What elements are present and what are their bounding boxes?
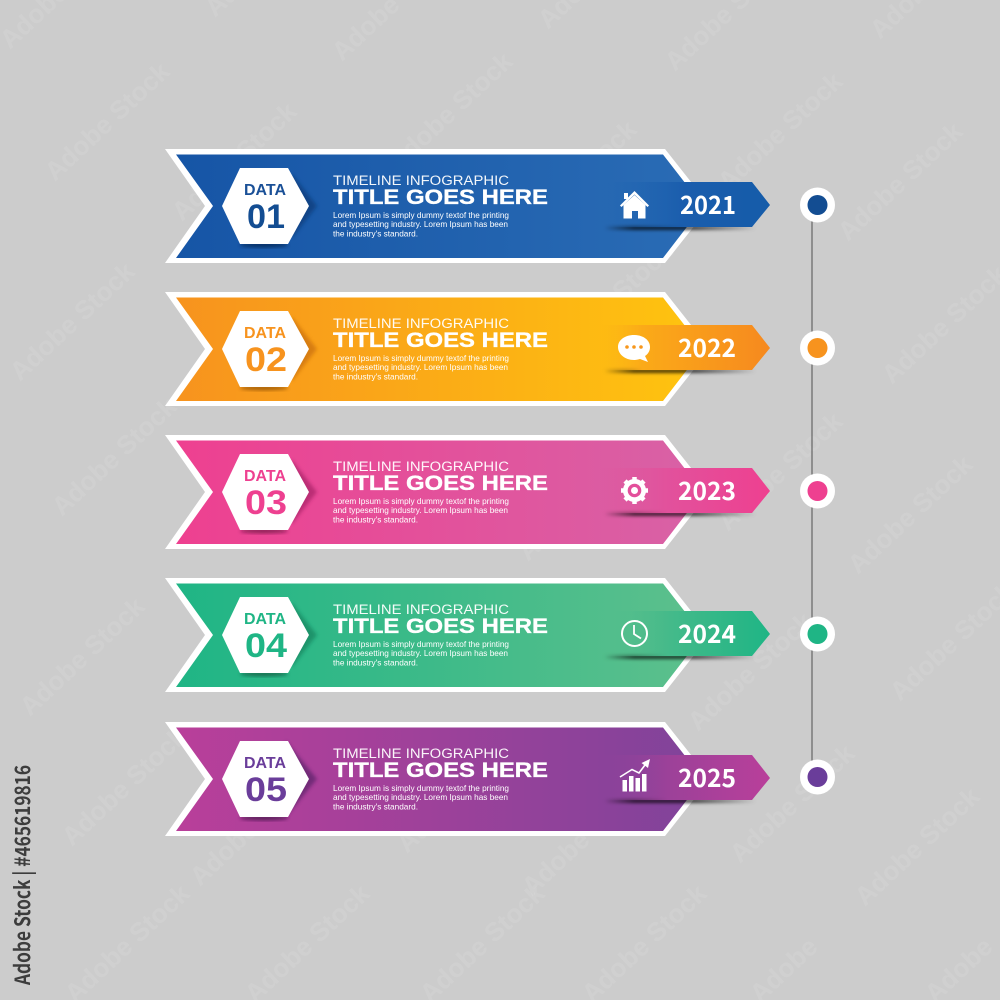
watermark pattern: Adobe Stock [39,56,176,186]
coloured arrow band [176,440,703,544]
year ribbon [600,611,770,659]
icon: growth chart [620,759,650,792]
timeline node 2024 [800,616,835,652]
text block: Lorem Ipsum is simply dummy textof the printing [333,353,509,363]
hexagon badge: DATA [244,182,286,199]
coloured arrow band [176,584,703,687]
hexagon badge: 04 [245,627,287,665]
white outline [165,149,710,263]
year ribbon: 2025 [678,759,736,795]
text block: and typesetting industry. Lorem Ipsum has been [333,362,508,372]
text block: Lorem Ipsum is simply dummy textof the printing [333,639,509,649]
text block: TIMELINE INFOGRAPHIC [333,602,509,617]
icon: house [620,191,649,218]
text block [333,602,548,668]
text block: TITLE GOES HERE [333,186,548,209]
watermark pattern: Adobe Stock [682,606,819,736]
hexagon badge: 02 [245,341,287,379]
text block: TITLE GOES HERE [333,615,548,638]
timeline connector line [811,205,813,777]
text block: the industry's standard. [333,802,418,812]
text block: TITLE GOES HERE [333,759,548,782]
text block [333,459,548,524]
text block: and typesetting industry. Lorem Ipsum has been [333,219,508,229]
hexagon badge: DATA [244,755,286,772]
text block: Lorem Ipsum is simply dummy textof the printing [333,210,509,220]
band 1: 2021 [165,149,770,263]
watermark pattern: Adobe Stock [516,771,653,901]
text block: TITLE GOES HERE [333,329,548,352]
timeline node 2023 [800,474,835,508]
band 4: 2024 [165,578,770,692]
year ribbon [600,325,770,373]
watermark pattern: Adobe Stock [832,116,969,246]
year ribbon: 2022 [678,329,736,365]
text block [333,316,548,382]
hexagon badge: DATA [244,611,286,628]
year ribbon: 2023 [678,472,736,508]
hexagon badge [222,454,317,534]
watermark pattern: Adobe Stock [724,738,861,868]
white outline [165,292,710,406]
watermark pattern: Adobe Stock [842,449,979,579]
hexagon badge: DATA [244,468,286,485]
hexagon badge [222,168,317,248]
watermark pattern: Adobe Stock [46,391,183,521]
year ribbon [600,468,770,516]
coloured arrow band [176,728,703,831]
hexagon badge: 05 [245,771,287,809]
hexagon badge [222,311,317,390]
hexagon badge: 01 [247,198,285,236]
text block: TIMELINE INFOGRAPHIC [333,459,509,474]
hexagon badge: DATA [244,325,286,342]
text block: the industry's standard. [333,514,418,524]
white outline [165,578,710,692]
stock id label: Adobe Stock | #465619816 [7,765,37,986]
watermark pattern: Adobe Stock [4,256,141,386]
watermark pattern: Adobe Stock [391,728,528,858]
watermark pattern: Adobe Stock [712,406,849,536]
year ribbon [600,755,770,803]
hexagon badge: 03 [245,484,287,522]
band 3: 2023 [165,435,770,549]
text block: the industry's standard. [333,658,418,668]
watermark pattern: Adobe Stock [512,436,649,566]
text block: TIMELINE INFOGRAPHIC [333,746,509,761]
year ribbon: 2021 [680,186,736,222]
text block: Lorem Ipsum is simply dummy textof the printing [333,496,509,506]
hexagon badge [222,741,317,820]
text block: TIMELINE INFOGRAPHIC [333,316,509,331]
text block: the industry's standard. [333,372,418,382]
text block: and typesetting industry. Lorem Ipsum has been [333,792,508,802]
timeline node 2021 [800,188,835,222]
timeline node 2022 [800,330,835,366]
text block: and typesetting industry. Lorem Ipsum has been [333,505,508,515]
icon: gear [621,477,648,504]
icon: clock [622,621,647,646]
text block: TIMELINE INFOGRAPHIC [333,173,509,188]
text block [333,173,548,238]
icon: speech bubble [618,335,650,362]
year ribbon: 2024 [678,615,736,651]
watermark pattern: Adobe Stock [506,114,643,244]
coloured arrow band [176,298,703,401]
hexagon badge [222,597,317,676]
white outline [165,435,710,549]
text block: the industry's standard. [333,228,418,238]
watermark pattern: Adobe Stock [382,46,519,176]
white outline [165,722,710,836]
year ribbon [600,182,770,230]
band 5: 2025 [165,722,770,836]
text block: and typesetting industry. Lorem Ipsum has been [333,648,508,658]
watermark pattern: Adobe Stock [849,781,986,911]
watermark pattern: Adobe Stock [14,591,151,721]
text block: TITLE GOES HERE [333,472,548,495]
watermark pattern: Adobe Stock [166,96,303,226]
text block [333,746,548,812]
watermark pattern: Adobe Stock [184,761,321,891]
coloured arrow band [176,154,703,258]
watermark pattern: Adobe Stock [712,66,849,196]
timeline node 2025 [800,760,835,794]
watermark pattern: Adobe Stock [542,236,679,366]
band 2: 2022 [165,292,770,406]
text block: Lorem Ipsum is simply dummy textof the printing [333,783,509,793]
watermark pattern: Adobe Stock [56,721,193,851]
